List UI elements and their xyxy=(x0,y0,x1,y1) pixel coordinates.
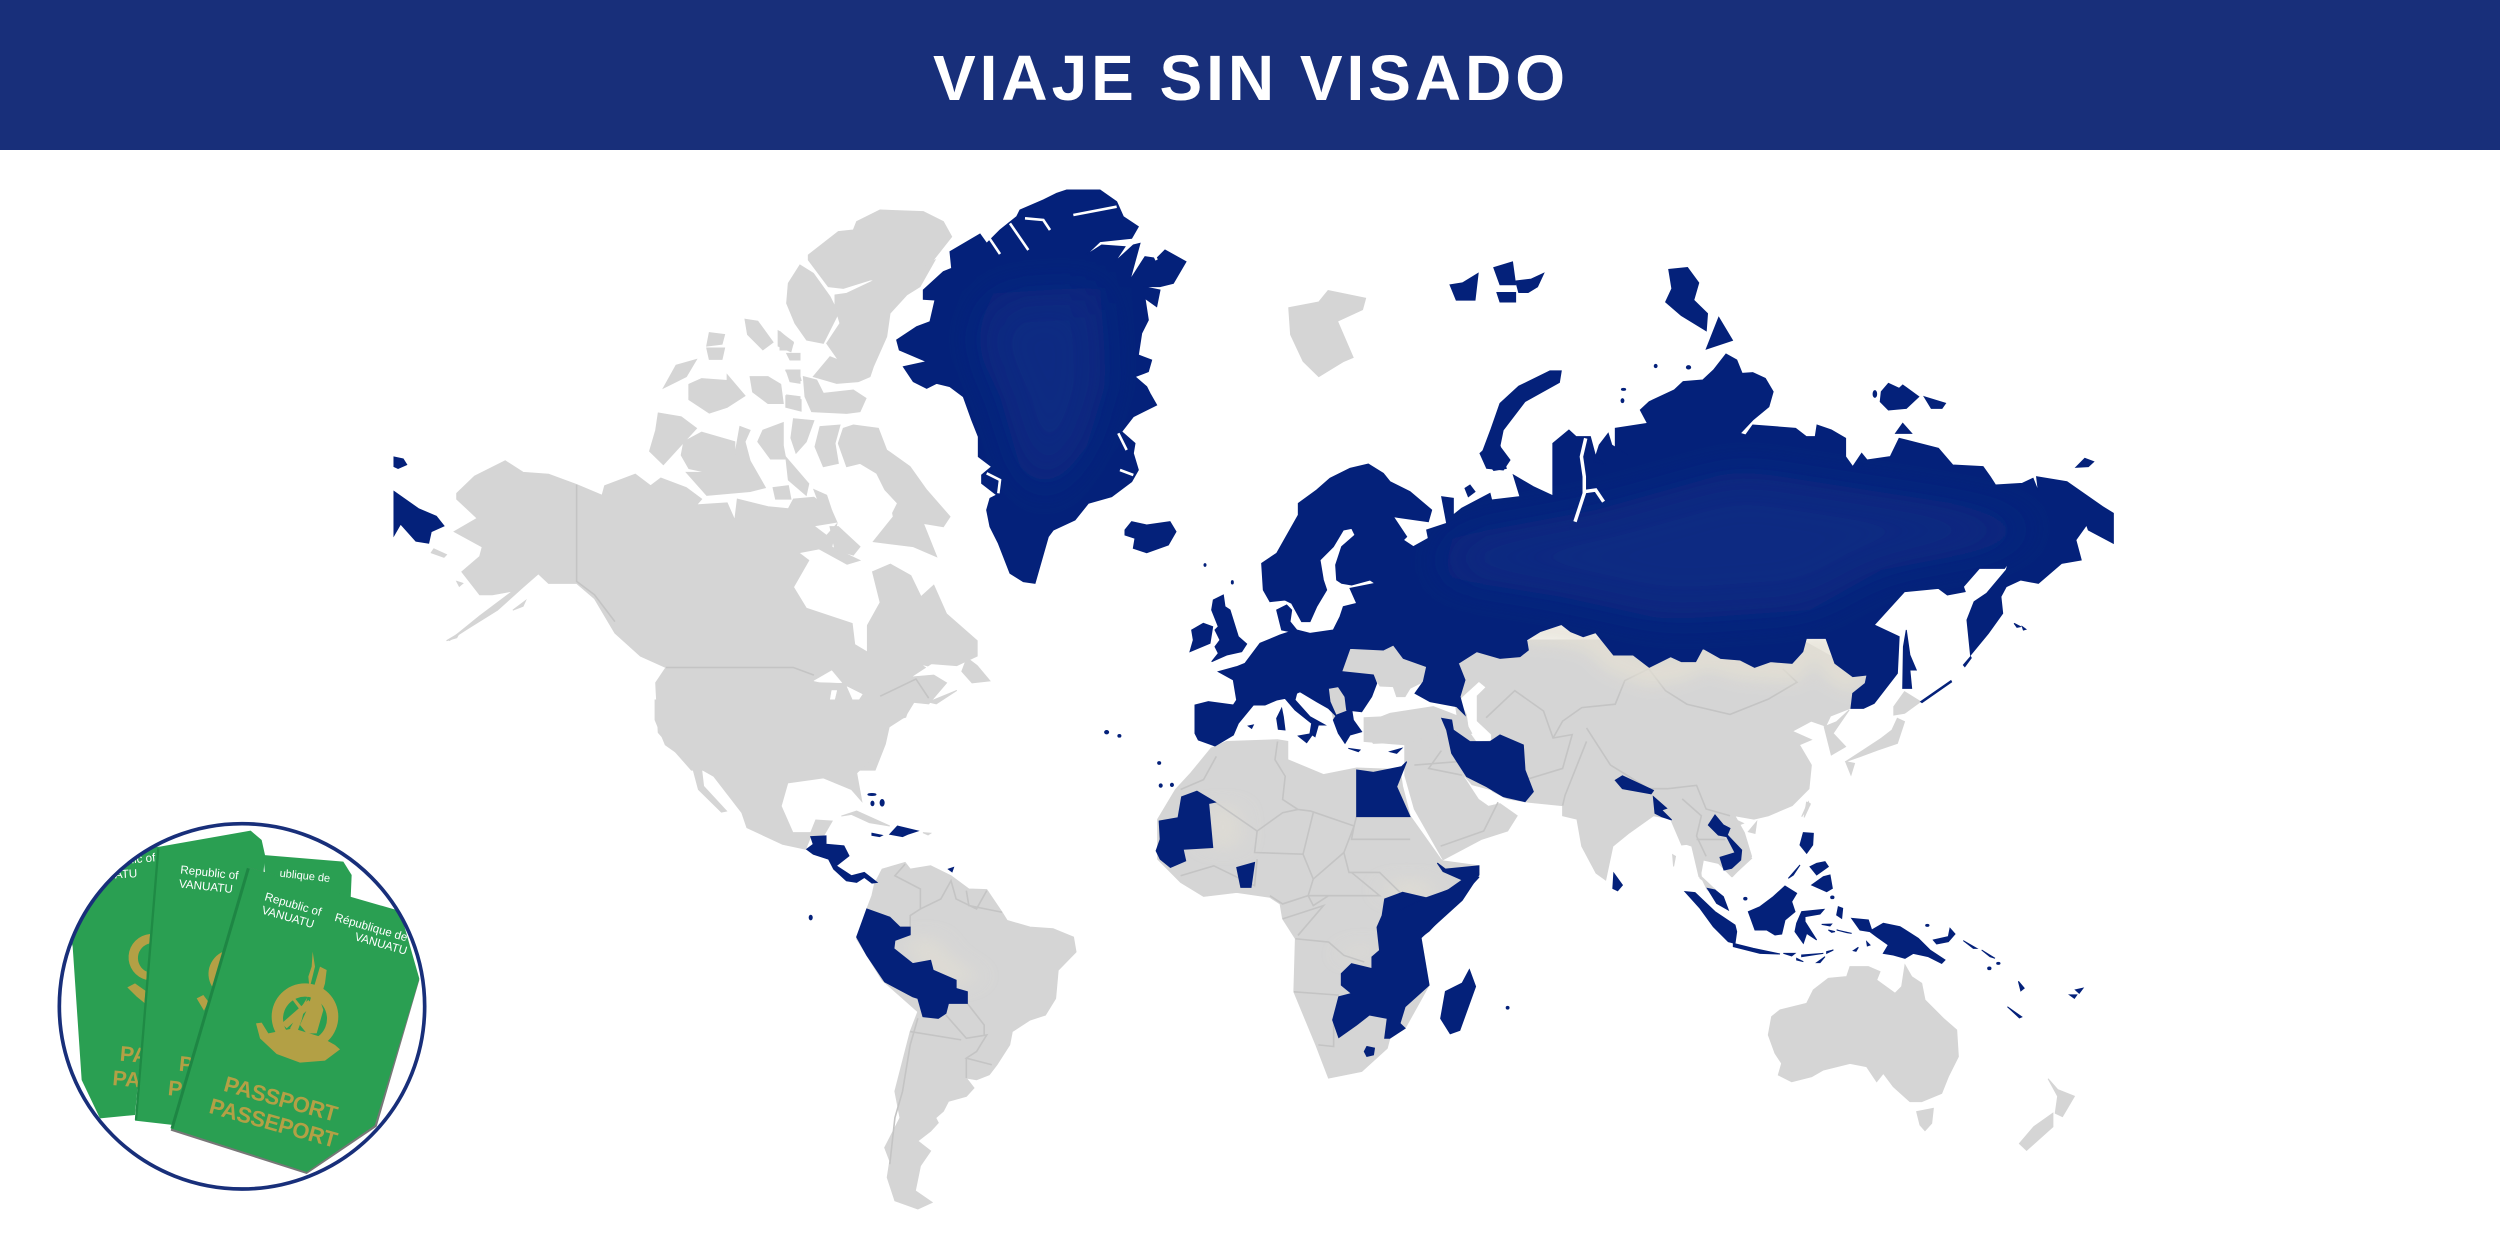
front passport: PASSPORT xyxy=(221,1071,341,1127)
soft glow beside Russia xyxy=(1521,630,1860,683)
North America and western Arctic Canada xyxy=(431,319,990,770)
circular frame xyxy=(59,824,425,1189)
Great Lakes xyxy=(814,666,954,715)
front passport: ublique de xyxy=(279,868,331,885)
middle passport xyxy=(135,831,265,1125)
front passport: VANUATU xyxy=(260,904,316,931)
Ob gulf and Taz estuary xyxy=(1575,438,1604,522)
passport illustration xyxy=(58,822,426,1191)
Turkey, Albania and Ukraine xyxy=(1328,645,1472,753)
front passport: VANUATU xyxy=(353,930,409,958)
front passport: PASSEPORT xyxy=(207,1093,341,1153)
Eurasia mainland and Arabia xyxy=(1364,640,1869,890)
Australia and Tasmania xyxy=(1768,965,1958,1131)
Ellesmere and Baffin islands xyxy=(780,210,952,557)
Mexico and southern United States xyxy=(655,700,931,849)
front passport: République de xyxy=(333,911,409,944)
Southeast Asia and Melanesia highlighted xyxy=(1653,797,2000,970)
lighter interior of Russia xyxy=(1435,470,2042,620)
middle passport: P xyxy=(178,1052,194,1077)
Europe and western Russia xyxy=(1190,440,1570,817)
middle passport: VANUATU xyxy=(178,877,233,896)
Iceland xyxy=(1125,522,1176,553)
Asia borders xyxy=(1414,669,1797,856)
Russia east of the Urals xyxy=(1517,354,2113,708)
back passport: PA xyxy=(112,1066,142,1092)
South America xyxy=(857,862,1076,1209)
Greenland xyxy=(897,190,1186,583)
white disc xyxy=(59,824,425,1189)
soft glow in South America and Africa xyxy=(918,806,1431,982)
North America borders xyxy=(577,485,929,698)
Greenland fjords xyxy=(987,207,1157,493)
New Zealand xyxy=(2019,1079,2074,1150)
Svalbard xyxy=(1289,291,1366,377)
back passport: ATU xyxy=(114,867,138,881)
Indochina, Hainan and Taiwan xyxy=(1672,780,1810,890)
front passport xyxy=(171,867,419,1174)
back passport: lic of xyxy=(131,851,157,866)
inner page tab xyxy=(263,855,352,898)
middle passport: P xyxy=(167,1076,183,1101)
back passport: PA xyxy=(119,1042,149,1068)
passport stack xyxy=(50,831,419,1174)
Arctic islands of Russia xyxy=(1450,262,1732,470)
Korea and Japan xyxy=(1824,692,1921,775)
title banner xyxy=(0,0,2500,150)
South America and Africa borders xyxy=(890,741,1410,1164)
Caspian Sea and Persian Gulf xyxy=(1460,682,1503,806)
Africa xyxy=(1158,740,1479,1078)
Central America, Caribbean and highlighted countries of South America and Africa xyxy=(807,731,1479,1056)
emblem xyxy=(256,952,340,1063)
Chukotka edge xyxy=(394,457,444,543)
middle passport: Republic of xyxy=(180,863,240,882)
lighter interior of Greenland xyxy=(973,287,1107,500)
Foxe Basin xyxy=(855,477,897,537)
title banner: VIAJE SIN VISADO xyxy=(933,42,1565,114)
front passport: Republic of xyxy=(263,890,324,919)
back passport xyxy=(72,846,160,1118)
Somalia, Madagascar, South Asia and Pacific islands highlighted xyxy=(1400,776,2083,1034)
